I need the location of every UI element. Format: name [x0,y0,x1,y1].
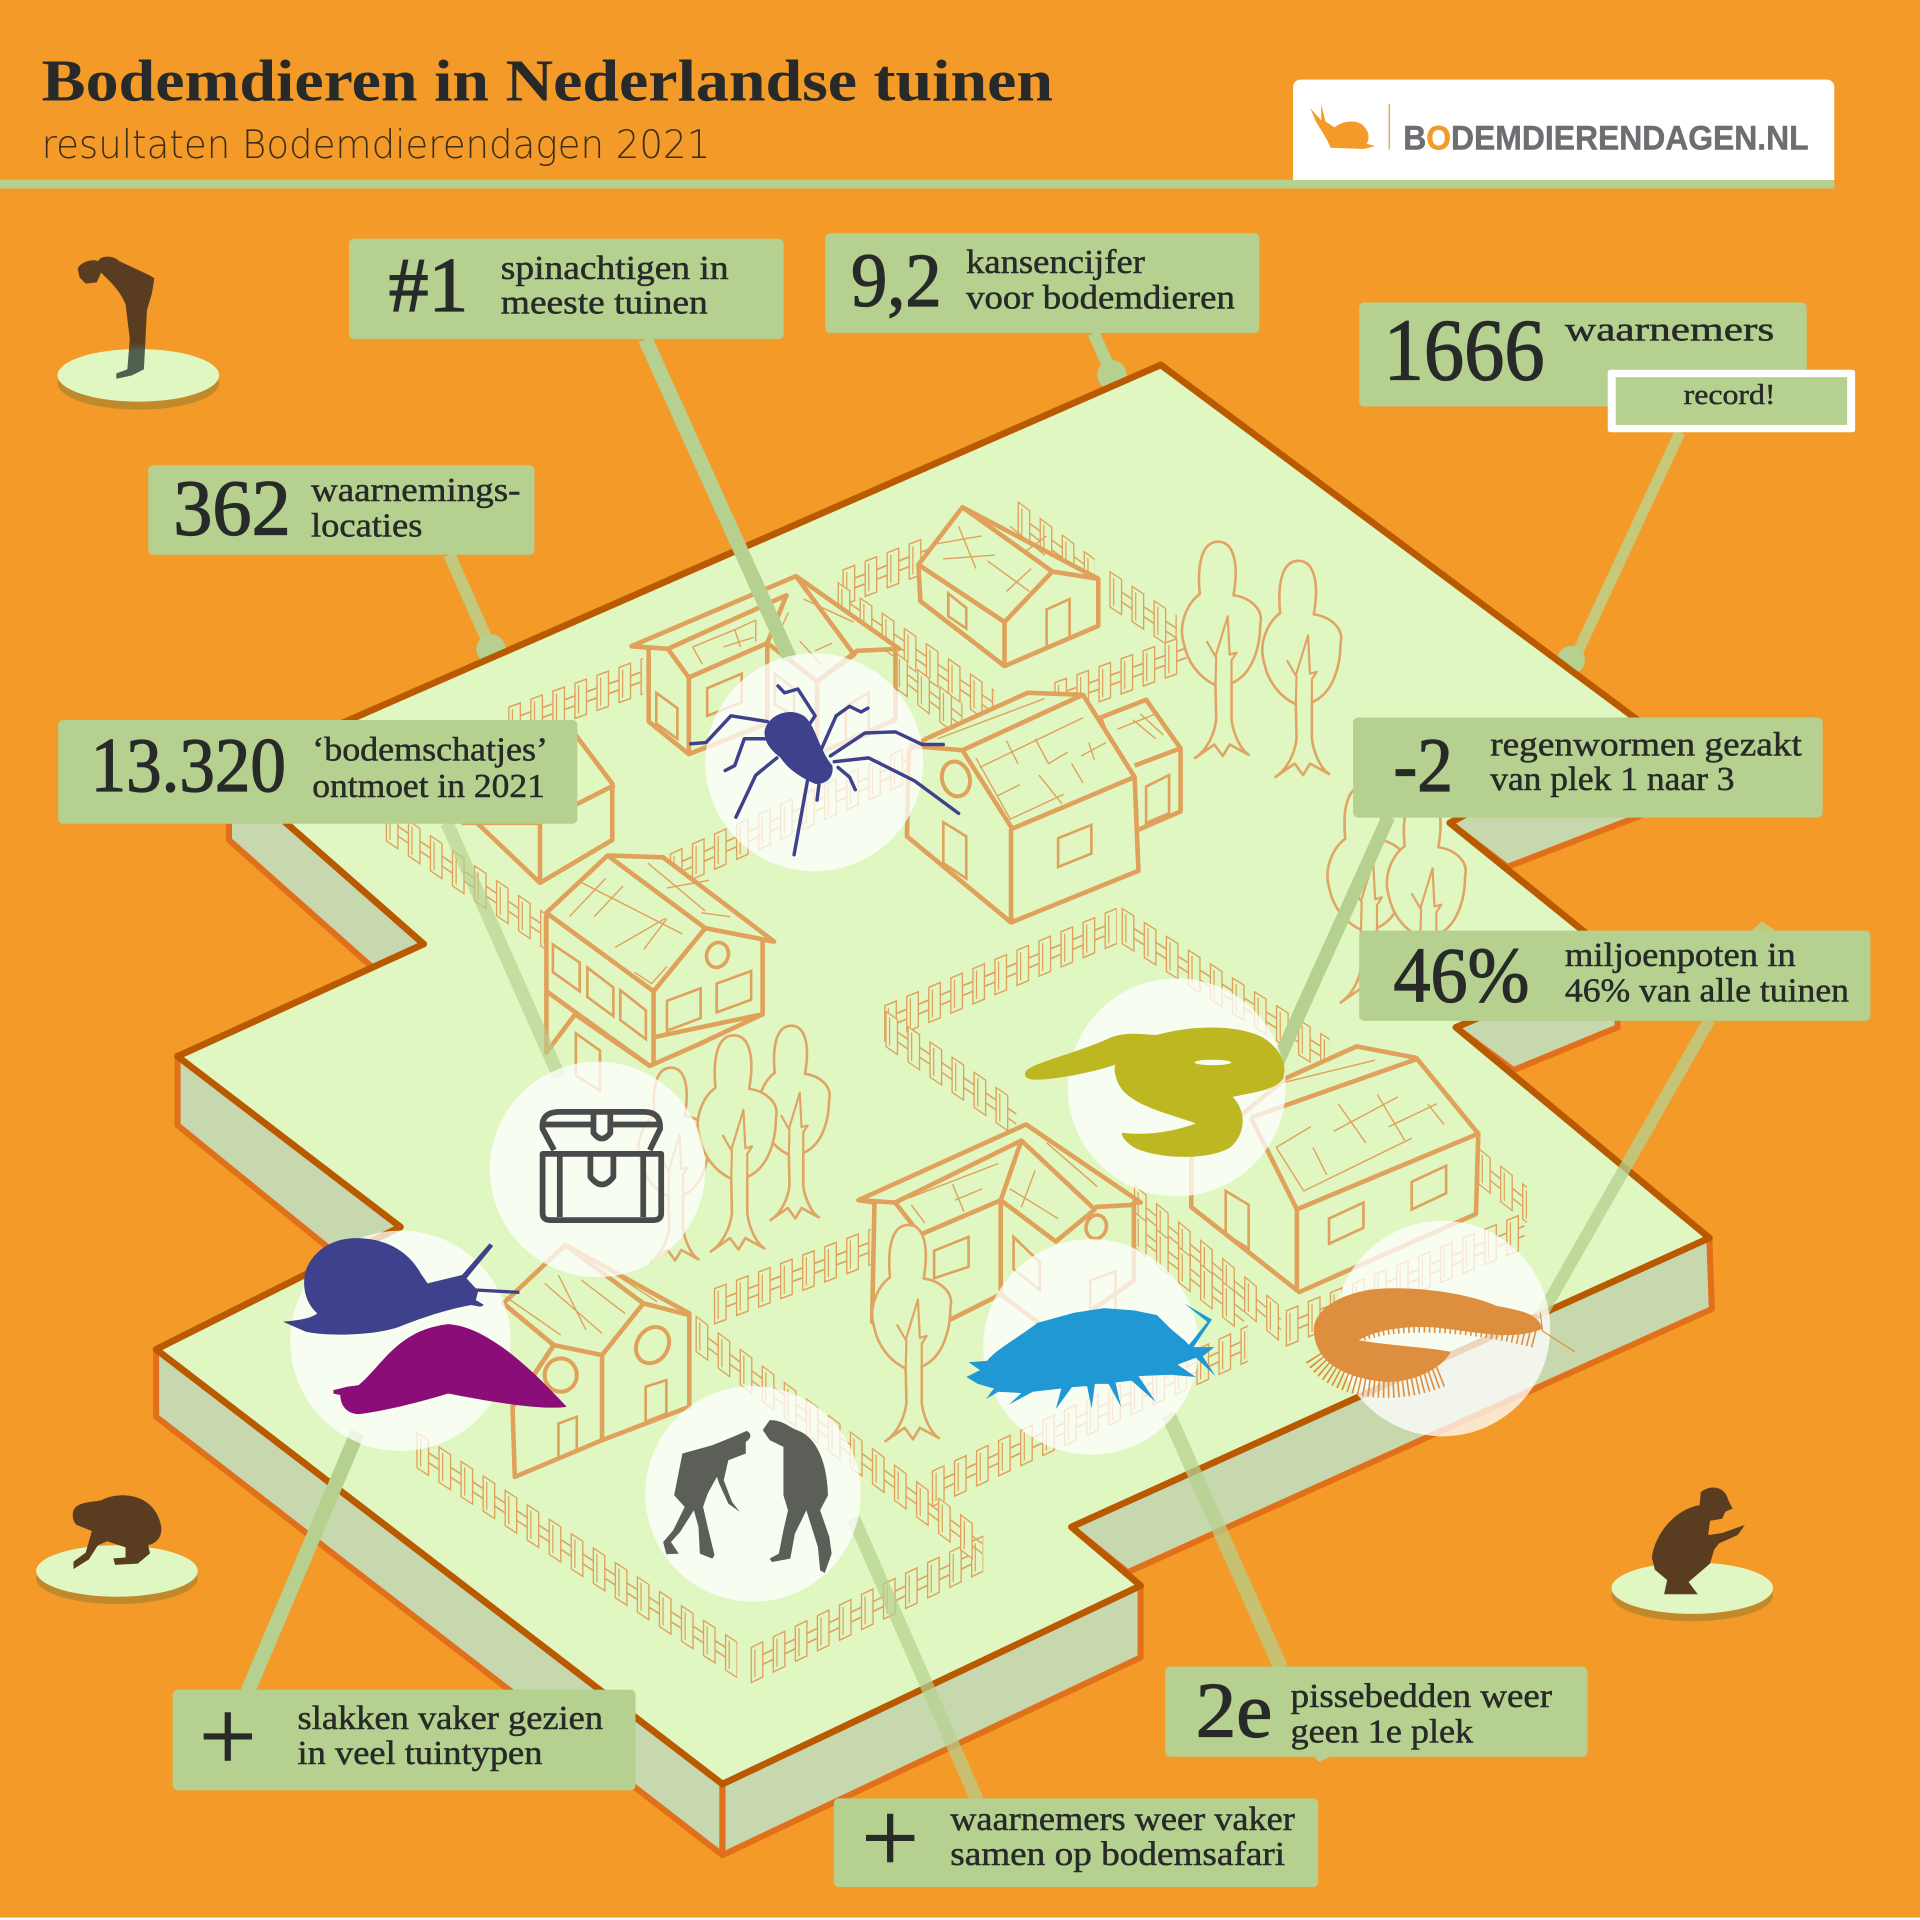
callout: locaties [148,464,534,555]
logo [1293,80,1834,180]
icon: logo snail [1310,104,1375,149]
callout: waarnemers: 1666 [1384,302,1545,400]
callout: kanscijfer [825,233,1259,333]
header rule [0,180,1834,189]
callout: pissebedden [1165,1666,1588,1757]
circle: snails [290,1231,511,1451]
callout: pissebedden: pissebedden weer [1291,1678,1552,1715]
person on disc: crouching with phone [1611,1487,1773,1621]
callout: bodemsafari [834,1781,1318,1894]
icon: slug [333,1324,567,1414]
house: large centre [907,693,1138,922]
callout: regenwormen: -2 [1393,722,1453,808]
callout: bodemsafari: + [862,1781,919,1894]
house: lower centre double gable [858,1124,1141,1336]
icon: snail [283,1238,519,1335]
icon: millipede [1314,1288,1575,1387]
callout: bodemschatjes: ontmoet in 2021 [312,768,545,805]
callout: pissebedden: geen 1e plek [1291,1713,1473,1750]
callout: spinachtigen [349,239,784,339]
logo text: BODEMDIERENDAGEN.NL [1403,119,1809,157]
house: right lower [1191,1046,1478,1292]
person on disc: crouching, left [36,1495,198,1604]
circle: spider [705,653,923,871]
garden fences [386,514,1527,1670]
callout: bodemschatjes: ‘bodemschatjes’ [312,731,548,768]
house: bottom left by slug [503,1245,689,1477]
platform side walls [156,722,1712,1855]
callout: slakken: slakken vaker gezien [298,1700,603,1737]
callout: slakken: in veel tuintypen [298,1735,543,1772]
badge: record: record! [1684,380,1776,411]
callout: bodemschatjes: 13.320 [91,722,286,808]
callout: bodemschatjes [58,720,577,824]
callout: kanscijfer: kansencijfer [966,244,1145,281]
callout: bodemsafari: waarnemers weer vaker [950,1801,1295,1838]
circle: isopod [983,1239,1199,1455]
callout: bodemsafari: samen op bodemsafari [950,1836,1285,1873]
callout: kanscijfer: 9,2 [851,239,942,323]
callout: slakken: + [199,1680,256,1793]
callout: spinachtigen: spinachtigen in [501,250,729,287]
circle: people [645,1386,861,1602]
callout: pissebedden: 2e [1196,1666,1272,1753]
callout: miljoenpoten [1359,931,1870,1021]
platform top surface [156,365,1709,1784]
connector lines over platform [247,339,1776,1800]
callout: locaties: locaties [311,507,422,544]
circle: worm [1068,978,1286,1196]
callout: locaties: waarnemings- [311,472,520,509]
house: upper left by spider [631,576,899,754]
callout: regenwormen [1353,718,1823,818]
callout: regenwormen: regenwormen gezakt [1490,727,1803,764]
icon: spider [691,686,959,855]
icon: treasure chest [542,1112,661,1220]
badge: record [1608,370,1855,432]
subtitle: resultaten Bodemdierendagen 2021 [42,123,710,168]
callout: waarnemers [1359,302,1855,432]
person on disc: bending over [58,257,219,410]
callout: locaties: 362 [173,464,291,552]
callout: miljoenpoten: 46% van alle tuinen [1565,973,1849,1010]
callout: spinachtigen: meeste tuinen [501,284,708,321]
connector lines behind platform [449,333,1680,674]
circle: treasure chest [490,1062,705,1277]
callout: miljoenpoten: 46% [1393,932,1529,1019]
callout: slakken [173,1680,636,1793]
house: right annex [1100,700,1181,831]
icon: worm [1025,1027,1284,1157]
house: under 13.320 box [462,735,615,883]
house: top centre [918,507,1098,666]
house: left centre with windows [546,855,774,1091]
trees [638,542,1466,1441]
title: Bodemdieren in Nederlandse tuinen [42,48,1053,113]
icon: two people looking at the ground [663,1420,832,1573]
circle: millipede [1335,1221,1550,1436]
icon: isopod [966,1304,1216,1409]
callout: spinachtigen: #1 [389,242,468,328]
callout: waarnemers: waarnemers [1565,311,1774,348]
callout: kanscijfer: voor bodemdieren [966,280,1235,317]
callout: regenwormen: van plek 1 naar 3 [1490,761,1734,798]
callout: miljoenpoten: miljoenpoten in [1565,937,1796,974]
